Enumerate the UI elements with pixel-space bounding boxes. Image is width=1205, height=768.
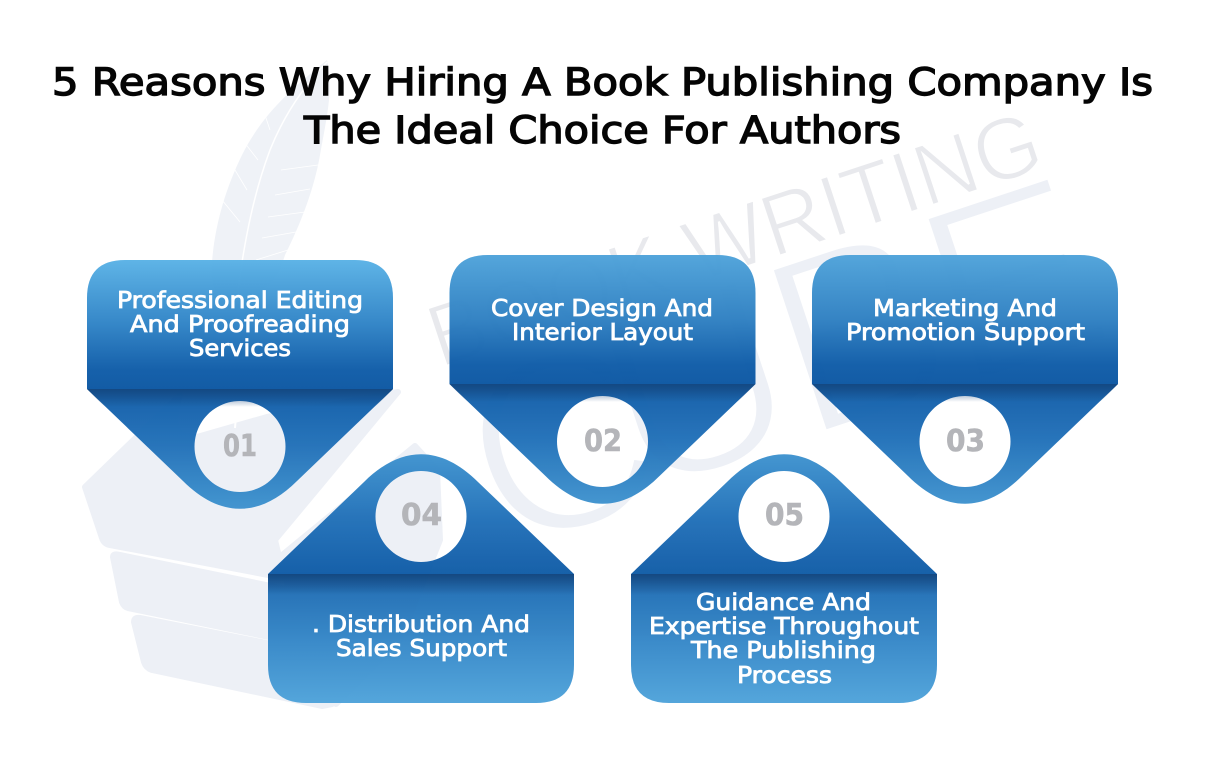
title: The Ideal Choice For Authors [303, 108, 901, 152]
label 02 [491, 296, 713, 346]
number 04: 04 [401, 498, 442, 533]
number 03: 03 [946, 424, 985, 459]
panel: reason 05 [631, 454, 937, 703]
watermark: BOOK WRITING wordmark: BOOK WRITING [415, 91, 1054, 386]
label 01: And Proofreading [130, 312, 350, 338]
label 05 [649, 590, 919, 689]
title: 5 Reasons Why Hiring A Book Publishing Company Is [52, 60, 1153, 104]
watermark: feather [212, 60, 330, 428]
label 01: Professional Editing [117, 288, 363, 314]
panel: reason 03 [812, 255, 1118, 504]
watermark: CUBE outlined wordmark: CUBE [424, 118, 1142, 607]
title [52, 60, 1153, 152]
label 03: Promotion Support [846, 320, 1085, 346]
background watermark: thumbs-up hand, feather and logo [85, 60, 1142, 706]
number 05: 05 [765, 498, 804, 533]
panel: reason 01 [87, 260, 393, 509]
label 04: Sales Support [336, 636, 507, 662]
label 04: . Distribution And [312, 612, 530, 638]
label 05: Expertise Throughout [649, 614, 919, 640]
label 02: Cover Design And [491, 296, 713, 322]
card shape 02 [450, 255, 756, 504]
label 01: Services [189, 336, 291, 362]
label 03 [846, 296, 1085, 346]
label 02: Interior Layout [512, 320, 693, 346]
panel: reason 04 [268, 454, 574, 703]
panel: reason 02 [450, 255, 756, 504]
label 01 [117, 288, 363, 362]
card shape 03 [812, 255, 1118, 504]
card shape 04 [268, 454, 574, 703]
label 05: Process [737, 663, 832, 689]
number 02: 02 [584, 424, 622, 459]
card shape 05 [631, 454, 937, 703]
watermark: thumb fist [85, 392, 440, 706]
label 03: Marketing And [873, 296, 1057, 322]
number 01: 01 [223, 429, 257, 464]
label 05: The Publishing [690, 638, 876, 664]
label 05: Guidance And [696, 590, 871, 616]
card shape 01 [87, 260, 393, 509]
label 04 [312, 612, 530, 662]
